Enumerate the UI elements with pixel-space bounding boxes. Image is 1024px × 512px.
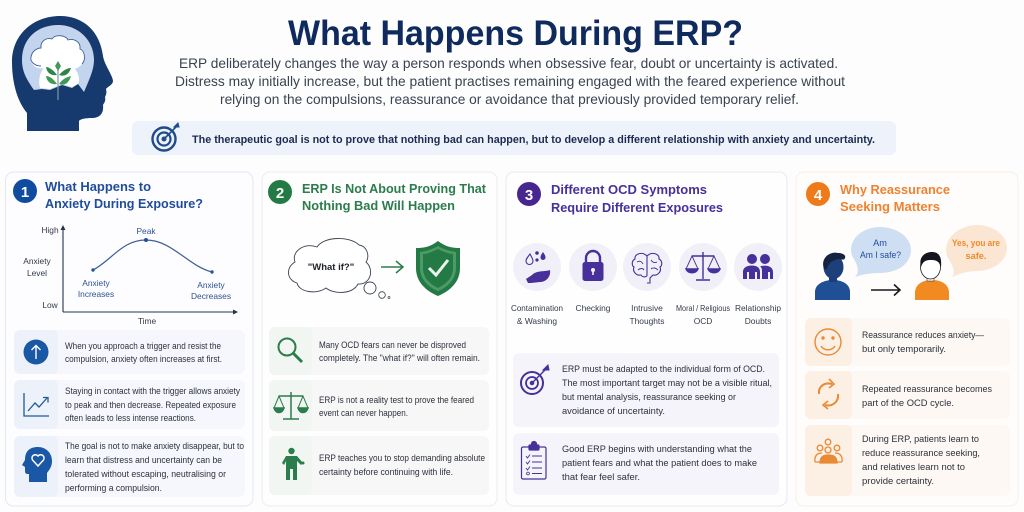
chart: anxiety curve: Anxiety [82,278,111,288]
text [562,444,757,482]
item: adapted to individual [513,353,779,427]
symptom: moral or religious: OCD [694,316,712,326]
person asking [815,253,850,300]
item: cannot be disproved [269,327,489,375]
chart: anxiety curve: Increases [78,289,114,299]
text: to peak and then decrease. Repeated exposure [65,400,236,410]
speech bubble: question [851,227,911,277]
chart: anxiety curve: Peak [136,226,156,236]
speech bubble: answer [946,225,1007,277]
heading 4: Seeking Matters [840,199,940,214]
icon: scales [274,392,308,419]
intro text block: Distress may initially increase, but the patient practises remaining engaged with the feared experience without [175,74,845,89]
icon: group of people [815,439,842,463]
text: provide certainty. [862,476,934,486]
text: that fear feel safer. [562,472,640,482]
heading 1: What Happens to [45,179,151,194]
item: not a reality test [269,380,489,431]
intro text block: relying on the compulsions, reassurance or avoidance that previously provided temporary relief. [220,92,799,107]
item: patients and relatives [805,425,1010,496]
text: certainty before continuing with life. [319,467,453,477]
heading 4: Why Reassurance [840,182,950,197]
text: event can never happen. [319,408,408,418]
number badge 3 [517,182,541,206]
text: and relatives learn not to [862,462,965,472]
text [65,386,241,423]
symptom: checking [569,243,617,313]
text [562,364,772,416]
icon: smile [815,329,841,355]
number badge 4 [806,182,830,206]
arrow [381,261,403,273]
text [65,341,222,364]
arrow [871,284,900,296]
title: What Happens During ERP? [288,14,743,53]
heading 2: ERP Is Not About Proving That [302,181,487,196]
text: The most important target may not be a visible ritual, [562,378,772,388]
symptom: contamination: & Washing [517,316,557,326]
goal statement: The therapeutic goal is not to prove that nothing bad can happen, but to develop a different relationship with anxiety and uncertainty. [192,134,875,146]
symptom: intrusive thoughts: Intrusive [631,303,663,313]
intro text block [175,56,845,107]
item: good ERP [513,433,779,495]
heading 3 [551,182,723,215]
text [319,395,474,418]
item: anxiety increases [14,330,245,374]
symptom: contamination: Contamination [511,303,563,313]
icon: magnifier [278,338,302,362]
symptom: relationship doubts: Relationship [735,303,781,313]
icon: target [521,365,549,394]
speech bubble: question: Am [873,238,887,248]
text: ERP is not a reality test to prove the feared [319,395,474,405]
text: performing a compulsion. [65,483,162,493]
item: tolerate distress [14,436,245,497]
chart: anxiety curve [23,225,238,326]
text: Staying in contact with the trigger allows anxiety [65,386,241,396]
heading 1 [45,179,203,211]
text: reduce reassurance seeking, [862,448,980,458]
panel 1: anxiety during exposure [6,172,253,506]
icon: up arrow [24,340,48,364]
chart: anxiety curve: Time [138,316,156,326]
icon: clipboard checklist [522,442,546,479]
text: but only temporarily. [862,344,946,354]
heading 2 [302,181,487,213]
icon: line chart [24,393,49,416]
goal banner [132,121,896,155]
text: but mental analysis, reassurance seeking or [562,392,736,402]
intro text block: ERP deliberately changes the way a person responds when obsessive fear, doubt or uncertainty is activated. [179,56,838,71]
item: stop demanding certainty [269,436,489,495]
text [862,330,984,354]
number badge 1 [13,179,37,203]
number badge 2 [268,180,292,204]
chart: anxiety curve: Anxiety [197,280,226,290]
text: ERP must be adapted to the individual form of OCD. [562,364,765,374]
text [862,384,993,408]
item: peak and decrease [14,380,245,429]
text [65,441,244,493]
text: Good ERP begins with understanding what the [562,444,752,454]
text: learn that distress and uncertainty can be [65,455,222,465]
symptom: intrusive thoughts [623,243,671,326]
chart: anxiety curve: Low [42,300,59,310]
icon: shield with check [416,241,460,296]
speech bubble: question: Am I safe? [860,250,901,260]
text: When you approach a trigger and resist the [65,341,221,351]
text: Many OCD fears can never be disproved [319,340,466,350]
icon: cycle arrows [819,379,838,409]
chart: anxiety curve: Level [27,268,47,278]
text: completely. The "what if?" will often remain. [319,353,480,363]
text: The goal is not to make anxiety disappear, but to [65,441,244,451]
heading 4 [840,182,950,214]
thought cloud [288,238,390,298]
text [319,340,480,363]
heading 3: Different OCD Symptoms [551,182,707,197]
symptom: intrusive thoughts: Thoughts [630,316,664,326]
symptom: moral or religious: Moral / Religious [676,303,730,313]
panel 4: reassurance seeking [796,172,1018,506]
symptom: relationship doubts [734,243,782,326]
speech bubble: answer: Yes, you are [952,238,1000,248]
text: often leads to less intense reactions. [65,413,196,423]
thought cloud: "What if?" [308,262,354,273]
panel 2: not about proving [262,172,497,506]
icon: head with plant [12,16,113,131]
chart: anxiety curve: Anxiety [23,256,52,266]
text: ERP teaches you to stop demanding absolute [319,453,485,463]
chart: anxiety curve: Decreases [191,291,231,301]
text [319,453,485,477]
text: tolerated without escaping, neutralising or [65,469,226,479]
item: part of the cycle [805,371,1010,419]
icon: person [282,448,304,480]
number badge 1: 1 [21,184,29,201]
number badge 2: 2 [276,185,284,202]
text: patient fears and what the patient does to make [562,458,757,468]
icon: head with heart [22,447,52,482]
number badge 4: 4 [814,187,823,204]
text: During ERP, patients learn to [862,434,979,444]
symptom: contamination [511,243,563,326]
symptom: relationship doubts: Doubts [745,316,771,326]
chart: anxiety curve: High [41,225,59,235]
speech bubble: answer: safe. [966,251,986,261]
number badge 3: 3 [525,187,533,204]
heading 3: Require Different Exposures [551,200,723,215]
text: Repeated reassurance becomes [862,384,993,394]
symptom: checking: Checking [576,303,611,313]
heading 2: Nothing Bad Will Happen [302,198,455,213]
text: Reassurance reduces anxiety— [862,330,984,340]
text: avoidance of uncertainty. [562,406,665,416]
panel 3: different symptoms [506,172,787,506]
text: compulsion, anxiety often increases at first. [65,354,222,364]
icon: target [152,123,179,150]
text: part of the OCD cycle. [862,398,954,408]
symptom: moral or religious [676,243,730,326]
item: reduces temporarily [805,318,1010,366]
heading 1: Anxiety During Exposure? [45,196,203,211]
person answering [915,252,949,300]
text [862,434,980,486]
